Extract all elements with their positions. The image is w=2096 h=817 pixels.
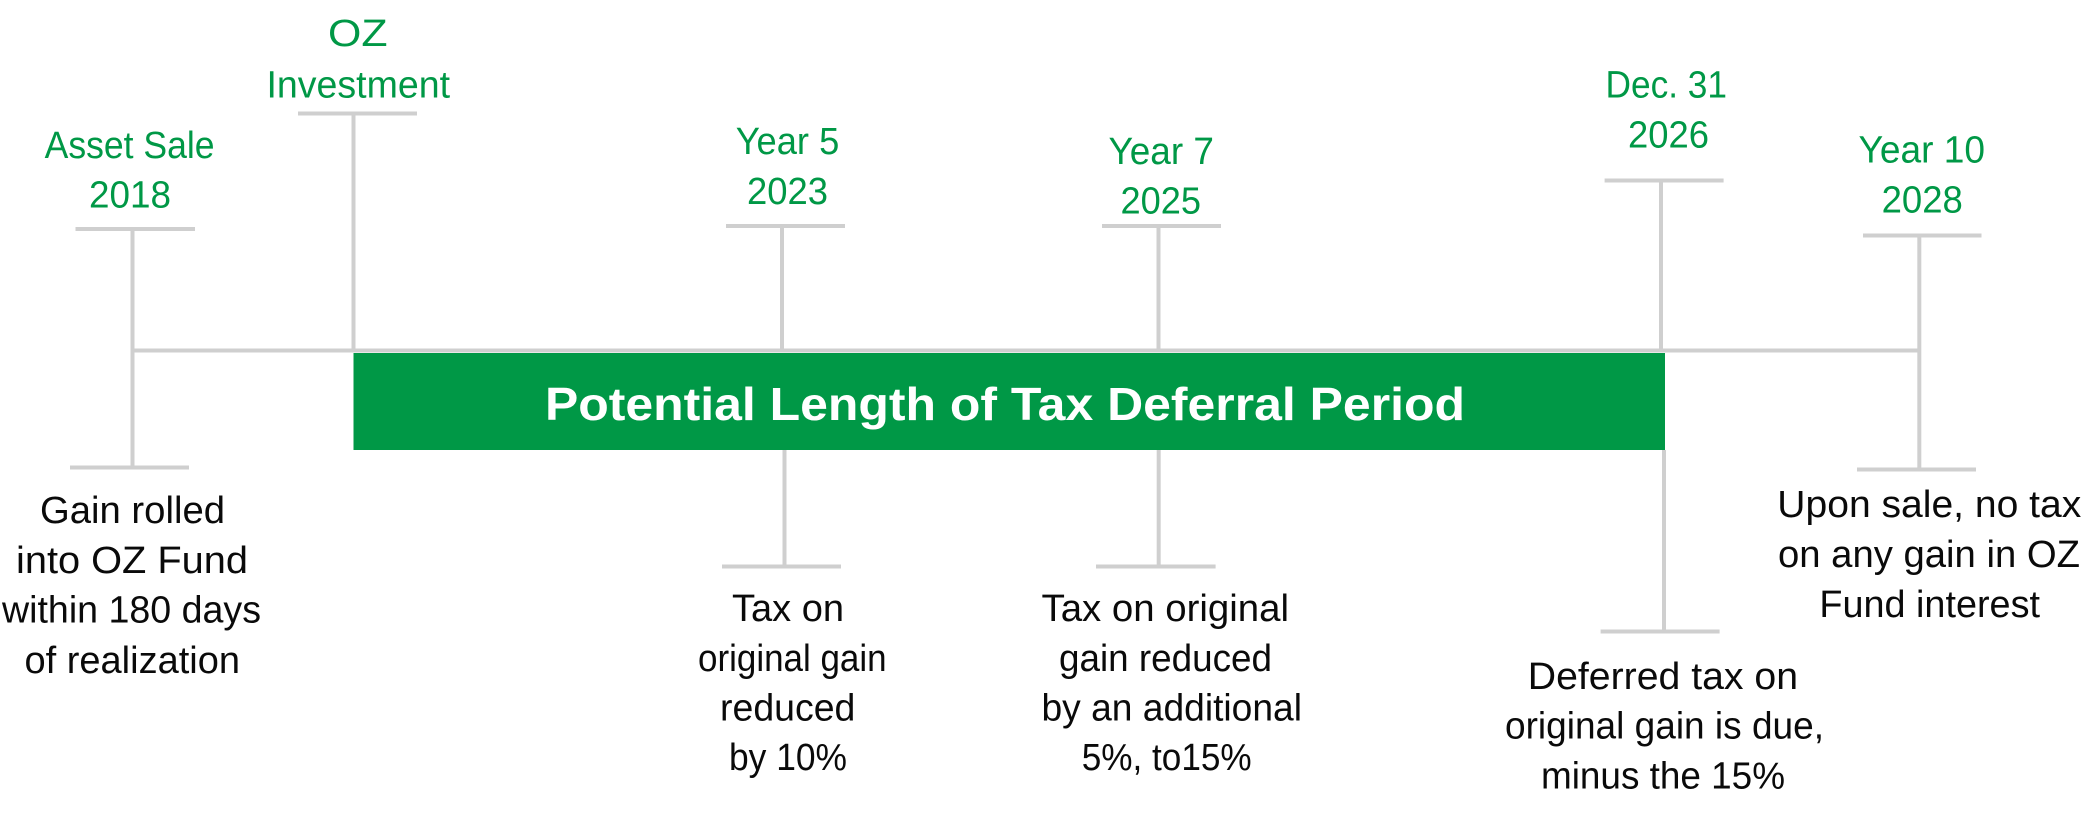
label: Year 7 2025 bbox=[1108, 131, 1214, 223]
label: Year 10 2028 bbox=[1858, 130, 1985, 222]
label: Year 7 2025: 2025 bbox=[1120, 181, 1201, 223]
note: additional 5% reduction: 5%, to15% bbox=[1082, 737, 1252, 779]
label: Asset Sale 2018 bbox=[45, 125, 215, 216]
note: tax reduced by 10%: reduced bbox=[720, 688, 855, 730]
note: no tax upon sale bbox=[1777, 484, 2081, 626]
note: gain rolled into OZ Fund bbox=[1, 490, 261, 682]
note: gain rolled into OZ Fund: of realization bbox=[24, 640, 240, 682]
label: Dec. 31 2026: 2026 bbox=[1628, 114, 1709, 156]
marker: OZ Investment bbox=[266, 13, 450, 350]
note: additional 5% reduction bbox=[1042, 588, 1302, 779]
note: tax reduced by 10%: original gain bbox=[698, 638, 887, 680]
label: Year 5 2023 bbox=[736, 121, 839, 213]
note: additional 5% reduction: Tax on original bbox=[1042, 588, 1289, 630]
label: OZ Investment: Investment bbox=[266, 64, 450, 106]
marker: Dec. 31 2026 bbox=[1505, 64, 1824, 797]
label: OZ Investment bbox=[266, 13, 450, 106]
note: gain rolled into OZ Fund: within 180 days bbox=[1, 590, 261, 632]
label: Dec. 31 2026 bbox=[1606, 64, 1727, 156]
label: OZ Investment: OZ bbox=[328, 13, 388, 55]
note: tax reduced by 10%: Tax on bbox=[732, 588, 844, 630]
connector: Year 5 bbox=[722, 226, 845, 566]
label: Dec. 31 2026: Dec. 31 bbox=[1606, 64, 1727, 106]
note: deferred tax due: minus the 15% bbox=[1541, 755, 1785, 797]
note: no tax upon sale: Upon sale, no tax bbox=[1777, 484, 2081, 526]
label: Asset Sale 2018: Asset Sale bbox=[45, 125, 215, 167]
note: gain rolled into OZ Fund: Gain rolled bbox=[40, 490, 225, 532]
note: additional 5% reduction: gain reduced bbox=[1059, 638, 1272, 680]
connector: Year 10 bbox=[1857, 236, 1982, 470]
label: Asset Sale 2018: 2018 bbox=[89, 174, 171, 216]
label: Year 5 2023: Year 5 bbox=[736, 121, 839, 163]
label: Year 7 2025: Year 7 bbox=[1108, 131, 1214, 173]
note: tax reduced by 10%: by 10% bbox=[729, 737, 847, 779]
note: deferred tax due: original gain is due, bbox=[1505, 705, 1824, 747]
connector: Asset Sale bbox=[70, 229, 195, 468]
bar title: Potential Length of Tax Deferral Period bbox=[545, 378, 1465, 430]
note: gain rolled into OZ Fund: into OZ Fund bbox=[16, 540, 248, 582]
label: Year 10 2028: 2028 bbox=[1882, 180, 1963, 222]
green deferral period bar bbox=[354, 353, 1665, 450]
note: deferred tax due bbox=[1505, 656, 1824, 797]
note: additional 5% reduction: by an additional bbox=[1042, 688, 1302, 730]
note: deferred tax due: Deferred tax on bbox=[1528, 656, 1798, 698]
label: Year 5 2023: 2023 bbox=[747, 171, 828, 213]
main horizontal timeline axis bbox=[131, 348, 1921, 352]
marker: Year 5 2023 bbox=[698, 121, 887, 779]
marker: Year 10 2028 bbox=[1777, 130, 2081, 626]
marker: Asset Sale 2018 bbox=[1, 125, 261, 682]
note: no tax upon sale: Fund interest bbox=[1819, 584, 2040, 626]
connector: Dec. 31 bbox=[1601, 180, 1724, 632]
label: Year 10 2028: Year 10 bbox=[1858, 130, 1985, 172]
connector: OZ Investment bbox=[298, 114, 417, 350]
note: no tax upon sale: on any gain in OZ bbox=[1778, 534, 2080, 576]
marker: Year 7 2025 bbox=[1042, 131, 1302, 779]
note: tax reduced by 10% bbox=[698, 588, 887, 779]
connector: Year 7 bbox=[1096, 226, 1221, 566]
